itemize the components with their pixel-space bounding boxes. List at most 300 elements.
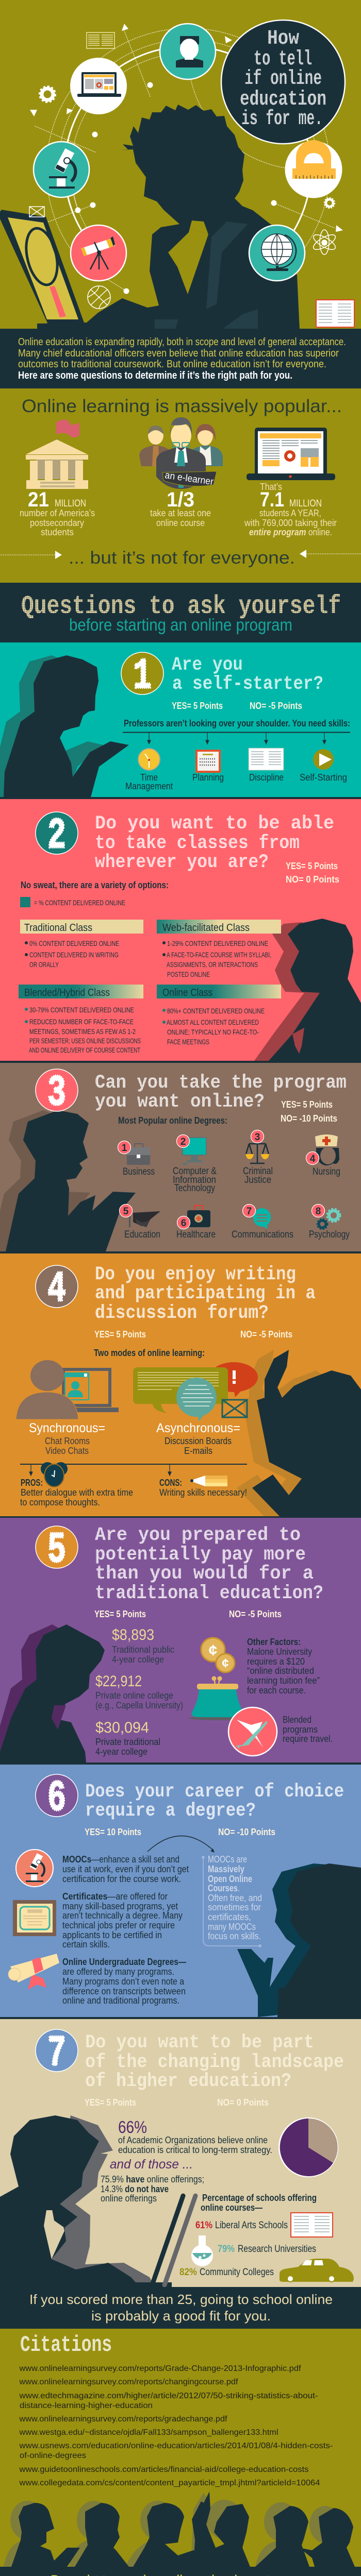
number badge: 5 (47, 1526, 66, 1575)
degrees text: online and traditional programs. (62, 1995, 179, 2006)
asynchronous list: Discussion Boards (165, 1436, 232, 1446)
stat: liberal arts (195, 2220, 288, 2231)
blended travel note: programs (283, 1724, 318, 1735)
blended travel note: Blended (283, 1715, 311, 1725)
points: NO= 0 Points (217, 2097, 269, 2108)
points (172, 701, 302, 711)
rank badges: 8 (316, 1206, 321, 1217)
skill labels: Planning (192, 772, 224, 783)
option: web-facilitated class: 1-29% CONTENT DELIVERED ONLINE (167, 939, 268, 947)
MOOCs text (62, 1854, 189, 1884)
stat: 66% (118, 2117, 272, 2155)
icon: gear (40, 87, 55, 102)
stat: 21 million: students (41, 527, 74, 537)
footer credit (0, 2567, 361, 2576)
option: traditional class: 0% CONTENT DELIVERED ONLINE (29, 939, 119, 947)
option: blended class: REDUCED NUMBER OF FACE-TO-FACE (29, 1018, 134, 1026)
degree: education (124, 1211, 160, 1240)
option: blended class: 30-79% CONTENT DELIVERED ONLINE (29, 1006, 134, 1014)
pros text: Better dialogue with extra time (21, 1487, 133, 1498)
stat: community colleges: 82% (179, 2267, 197, 2278)
points: NO= -5 Points (229, 1609, 282, 1619)
laptop screen bars (152, 2196, 195, 2285)
degrees text: difference on transcripts between (62, 1986, 186, 1996)
cost: public college: Traditional public (112, 1645, 174, 1655)
degrees text: Online Undergraduate Degrees— (62, 1957, 186, 1967)
pros text: to compose thoughts. (20, 1497, 100, 1507)
title text: How (267, 27, 299, 50)
tablet with magnifier (0, 210, 87, 330)
icon: diploma scroll (8, 1954, 59, 1990)
rank badges: 6 (181, 1218, 186, 1229)
icon: book (249, 748, 284, 770)
school percentages heading: Percentage of schools offering (202, 2193, 317, 2203)
option: blended class: Blended/Hybrid Class (24, 987, 110, 998)
citation links: www.guidetoonlineschools.com/articles/financial-aid/college-education-costs (19, 2465, 308, 2474)
blended travel note: require travel. (283, 1734, 333, 1744)
panel: conclusion: If you scored more than 25, going to school online (29, 2292, 333, 2307)
points: YES= 10 Points (85, 1827, 141, 1837)
stat: 7.1 million: with 769,000 taking their (244, 518, 337, 528)
icon: basketball (88, 286, 110, 309)
option: blended class: PER SEMESTER; USES ONLINE DISCUSSIONS (29, 1037, 141, 1045)
points: YES= 5 Points (94, 1609, 146, 1619)
silhouette (0, 655, 129, 797)
stat: 1/3: online course (156, 518, 205, 528)
option: traditional class: Traditional Class (24, 922, 92, 934)
modes lead: Two modes of online learning: (94, 1348, 205, 1358)
panel: question 5 (0, 1518, 361, 1765)
stat: liberal arts: Liberal Arts Schools (215, 2220, 288, 2231)
question: of higher education? (85, 2071, 291, 2092)
stat: 66%: of Academic Organizations believe online (118, 2135, 268, 2145)
e-learner banner text: an e-learner (164, 470, 215, 487)
cons text: CONS: (159, 1478, 182, 1488)
school percentages heading (201, 2193, 317, 2213)
panel: questions banner (0, 583, 361, 642)
icon circle: microscope (34, 142, 89, 197)
question (85, 2032, 344, 2092)
points (94, 1329, 292, 1340)
cost: public college (112, 1626, 174, 1665)
degrees text: Many programs don’t even note a (62, 1976, 185, 1987)
icon: coins and purse: ¢ (209, 1642, 217, 1659)
network arcs (46, 28, 330, 255)
icon: gear small (324, 198, 335, 208)
options lead: No sweat, there are a variety of options: (21, 880, 169, 890)
icon: asynchronous bubbles (133, 1362, 258, 1421)
cost: private college: 4-year college (95, 1747, 147, 1757)
citation links: www.onlinelearningsurvey.com/reports/gradechange.pdf (19, 2415, 227, 2424)
degree: computer: Technology (174, 1183, 215, 1194)
certificates text: many skill-based programs, yet (62, 1901, 178, 1911)
offerings stat: 75.9% have online offerings; (101, 2174, 204, 2184)
silhouette (0, 1110, 136, 1251)
option: traditional class (20, 920, 143, 969)
question (95, 1072, 347, 1113)
citation links: of-online-degrees (20, 2451, 86, 2460)
stat: community colleges: Community Colleges (200, 2267, 274, 2278)
MOOCs definition callout (202, 1854, 262, 1947)
points: YES= 5 Points (281, 1099, 333, 1110)
stat: 1/3 (150, 488, 211, 528)
certificates text (62, 1891, 183, 1950)
panel: popularity stats (0, 388, 361, 583)
icon: coins and purse: ¢ (222, 1656, 229, 1670)
stat: 7.1 million: entire program online. (249, 527, 332, 537)
degree: criminal justice: Justice (244, 1175, 271, 1185)
question: than you would for a (95, 1563, 314, 1585)
MOOCs definition callout: many MOOCs (208, 1922, 256, 1932)
icon: synchronous video chat (16, 1360, 119, 1419)
title text: education (240, 88, 326, 111)
cost: online college: $22,912 (95, 1673, 142, 1690)
icon: university building (26, 420, 88, 489)
cost: public college: 4-year college (112, 1654, 164, 1665)
MOOCs text: certification for the course work. (62, 1874, 181, 1884)
degree: nursing: Nursing (313, 1166, 340, 1177)
silhouette (254, 919, 361, 1061)
citation links: distance-learning-higher-education (20, 2401, 153, 2410)
icon: envelope (29, 207, 44, 217)
tagline with arrows (0, 548, 361, 568)
icon: clock (138, 749, 160, 770)
points: NO= 0 Points (286, 874, 339, 885)
other factors text: Other Factors: (247, 1637, 301, 1647)
degree: healthcare: Healthcare (176, 1229, 216, 1240)
arrow lines (26, 24, 343, 294)
option: web-facilitated class: ASSIGNMENTS, OR INTERACTIONS (167, 960, 258, 969)
option: web-facilitated class (157, 920, 281, 978)
points: YES= 5 Points (85, 2097, 136, 2108)
skill labels: Management (125, 781, 173, 791)
asynchronous list: Asynchronous= (156, 1421, 240, 1435)
degree: computer: Computer & (173, 1166, 217, 1177)
MOOCs definition callout: Open Online (208, 1874, 252, 1884)
panel: citations (0, 2329, 361, 2568)
points (85, 1827, 275, 1837)
panel: question 7 (0, 2019, 361, 2287)
stat: 7.1 million: That’s (260, 482, 282, 492)
stat: 1/3: take at least one (150, 508, 211, 518)
title text (240, 27, 326, 131)
cost: online college: (e.g., Capella University) (95, 1700, 183, 1710)
degrees text: are offered by many programs. (62, 1967, 174, 1977)
degree: healthcare (176, 1206, 216, 1240)
MOOCs definition callout: focus on skills. (208, 1931, 261, 1941)
other factors text: requires a $120 (247, 1656, 305, 1667)
certificates text: certain skills. (62, 1939, 110, 1950)
stat: liberal arts: 61% (195, 2220, 212, 2231)
option: online class: ALMOST ALL CONTENT DELIVERED (167, 1018, 259, 1026)
icon: open book (87, 32, 114, 48)
rank badges (118, 1130, 325, 1229)
points (85, 2097, 269, 2108)
icon: microscope badge (16, 1850, 53, 1887)
number badge (36, 2029, 78, 2078)
skill labels: Discipline (249, 772, 284, 783)
points: NO= -5 Points (250, 701, 302, 711)
points: NO= -5 Points (240, 1329, 292, 1340)
rank badges: 5 (123, 1206, 129, 1217)
degree: criminal justice: Criminal (243, 1166, 273, 1177)
offerings stat: online offerings (101, 2193, 157, 2204)
cost: private college: $30,094 (95, 1719, 149, 1736)
skill labels: Self-Starting (300, 772, 347, 783)
icon: pencil (190, 1476, 227, 1486)
panel: hero (0, 0, 361, 330)
stat: 21 million (20, 488, 95, 537)
icon: book (291, 2213, 333, 2237)
option: online class (157, 985, 281, 1046)
number badge: 3 (47, 1069, 66, 1118)
cost: online college: Private online college (95, 1690, 173, 1701)
icon circle: globe (249, 225, 305, 281)
cons text: Writing skills necessary! (159, 1487, 247, 1498)
degrees lead: Most Popular online Degrees: (118, 1115, 227, 1126)
stat: 21 million: 21 (28, 488, 49, 511)
question: discussion forum? (95, 1302, 269, 1324)
question: Do you want to be able (95, 813, 334, 835)
pros text (20, 1478, 133, 1507)
curved arrow (147, 1836, 215, 1853)
title circle (221, 20, 345, 144)
asynchronous list (156, 1421, 240, 1456)
question: wherever you are? (95, 852, 269, 873)
panel: question 1 (0, 642, 361, 799)
icon: alarm clock (41, 1462, 68, 1487)
number badge (36, 1265, 78, 1314)
option: blended class (19, 985, 143, 1054)
offerings stat: 14.3% do not have (101, 2184, 169, 2194)
question: traditional education? (95, 1583, 323, 1604)
number badge: 1 (133, 652, 152, 701)
rank badges: 7 (247, 1206, 252, 1217)
number badge (36, 812, 78, 861)
MOOCs text: use it at work, even if you don’t get (62, 1864, 189, 1874)
stat: 1/3: 1/3 (167, 488, 194, 511)
stat: 21 million: MILLION (55, 498, 86, 509)
MOOCs definition callout: sometimes for (208, 1902, 261, 1912)
audience silhouettes (4, 2492, 355, 2567)
question: require a degree? (85, 1800, 256, 1822)
pros text: PROS: (21, 1478, 43, 1488)
citation links: www.edtechmagazine.com/higher/article/2012/07/50-striking-statistics-about- (19, 2392, 318, 2400)
question: a self-starter? (172, 673, 323, 695)
points (94, 1609, 282, 1619)
icon: coins and purse (189, 1638, 247, 1720)
panel: intro text: outcomes to traditional coursework. But online education isn’t for everyone. (18, 359, 326, 370)
number badge: 6 (47, 1774, 66, 1823)
cons text (159, 1478, 247, 1498)
option: traditional class: OR ORALLY (29, 960, 59, 969)
citation links: www.westga.edu/~distance/ojdla/Fall133/sampson_ballenger133.html (19, 2428, 278, 2437)
icon circle: protractor (285, 140, 342, 198)
synchronous list: Chat Rooms (45, 1436, 90, 1446)
icon: laptop large (247, 428, 335, 480)
silhouette (0, 2115, 172, 2287)
number badge (36, 1774, 78, 1823)
MOOCs definition callout: Massively (208, 1864, 244, 1874)
question (95, 1524, 323, 1604)
number badge (36, 1069, 78, 1118)
skill labels: Time (140, 772, 158, 783)
question: to take classes from (95, 833, 300, 854)
points: YES= 5 Points (94, 1329, 146, 1340)
icon: calendar (195, 750, 221, 773)
question: Do you want to be part (85, 2032, 314, 2054)
stat: 66%: education is critical to long-term strategy. (118, 2145, 272, 2155)
question (95, 1264, 316, 1324)
citation links: www.collegedata.com/cs/content/content_payarticle_tmpl.jhtml?articleId=10064 (19, 2479, 320, 2487)
question: and participating in a (95, 1283, 316, 1304)
pie chart (278, 2117, 338, 2177)
panel: intro text: Here are some questions to determine if it’s the right path for you. (18, 370, 292, 381)
citation links: www.usnews.com/education/online-education/articles/2014/01/08/4-hidden-costs- (19, 2442, 333, 2450)
points: YES= 5 Points (286, 861, 338, 871)
question: Do you enjoy writing (95, 1264, 296, 1285)
certificates text: aren’t technically a degree. Many (62, 1910, 183, 1921)
degree: education: Education (124, 1229, 160, 1240)
degree: nursing (313, 1134, 340, 1177)
degree: psychology (309, 1209, 350, 1240)
stat: research universities: Research Universities (238, 2244, 316, 2255)
cost: private college (95, 1719, 160, 1757)
question: you want online? (95, 1091, 265, 1113)
MOOCs definition callout: certificates, (208, 1912, 251, 1922)
other factors text (247, 1637, 320, 1696)
question: potentially pay more (95, 1544, 306, 1566)
MOOCs text: MOOCs—enhance a skill set and (62, 1854, 179, 1865)
option: online class: ONLINE; TYPICALLY NO FACE-TO- (167, 1028, 259, 1036)
number badge (36, 1526, 78, 1575)
points: NO= -10 Points (218, 1827, 275, 1837)
stat: 7.1 million (244, 482, 337, 537)
degree: business: Business (123, 1166, 155, 1177)
citation links (19, 2364, 333, 2487)
and of those: and of those ... (110, 2157, 193, 2172)
option: online class: FACE MEETINGS (167, 1038, 209, 1046)
icon: play (313, 749, 334, 770)
stat: 7.1 million: MILLION (289, 498, 322, 509)
other factors text: for each course. (247, 1685, 306, 1696)
stat: 7.1 million: 7.1 (260, 488, 284, 511)
icon: flask (191, 2235, 213, 2266)
icon: car (280, 2259, 354, 2282)
option: web-facilitated class: Web-facilitated Class (162, 922, 250, 934)
question: Are you (172, 654, 243, 676)
MOOCs definition callout: Often free, and (208, 1893, 262, 1903)
option: blended class: AND ONLINE DELIVERY OF COURSE CONTENT (29, 1046, 140, 1054)
synchronous list: Synchronous= (29, 1421, 105, 1435)
synchronous list (29, 1421, 105, 1456)
title text: if online (244, 67, 322, 91)
panel: question 6 (0, 1765, 361, 2019)
silhouette (0, 1624, 105, 1762)
blended travel note (283, 1715, 333, 1744)
number badge: 2 (47, 812, 66, 861)
degree: psychology: Psychology (309, 1229, 350, 1240)
icon: e-learners group (139, 417, 223, 489)
number badge: 4 (47, 1265, 66, 1314)
MOOCs definition callout: Courses. (208, 1883, 240, 1893)
icon: certificate (13, 1900, 56, 1936)
option: online class: 80%+ CONTENT DELIVERED ONLINE (167, 1007, 265, 1015)
legend: = % CONTENT DELIVERED ONLINE (34, 899, 125, 907)
option: web-facilitated class: A FACE-TO-FACE COURSE WITH SYLLABI, (167, 951, 271, 959)
icon: atom (311, 230, 337, 255)
panel: conclusion (0, 2287, 361, 2329)
icon: red book (316, 300, 354, 327)
question (172, 654, 323, 695)
degree: communications (232, 1208, 293, 1240)
MOOCs definition callout: MOOCs are (208, 1854, 247, 1865)
pros cons arrows (20, 1464, 247, 1476)
panel: question 2 (0, 799, 361, 1063)
panel: intro text (0, 329, 361, 388)
icon circle: teacher (160, 24, 216, 79)
stat: 21 million: postsecondary (30, 518, 84, 528)
points (286, 861, 339, 885)
tagline with arrows: ... but it’s not for everyone. (69, 548, 295, 568)
panel: question 4 (0, 1253, 361, 1518)
icon circle: telescope (71, 225, 126, 281)
certificates text: technical jobs prefer or require (62, 1920, 175, 1930)
rank badges: 2 (180, 1137, 186, 1147)
icon: airplane (228, 1707, 277, 1756)
degree: computer (173, 1138, 217, 1194)
icon circle: laptop (70, 58, 127, 114)
legend (20, 897, 125, 907)
rank badges: 4 (310, 1154, 316, 1164)
certificates text: Certificates—are offered for (62, 1891, 168, 1902)
synchronous list: Video Chats (45, 1446, 89, 1456)
question: Are you prepared to (95, 1524, 301, 1546)
stat: 66%: 66% (118, 2117, 147, 2137)
number badge: 7 (47, 2029, 66, 2078)
degree: business (123, 1144, 155, 1177)
panel: question 3 (0, 1063, 361, 1253)
other factors text: “online distributed (247, 1666, 314, 1676)
title text: to tell (254, 48, 312, 71)
stat: community colleges (179, 2267, 274, 2278)
stat: 21 million: number of America’s (20, 508, 95, 518)
degree: computer: Information (173, 1175, 216, 1185)
citations heading: Citations (20, 2332, 112, 2358)
skill labels (125, 772, 347, 791)
points: NO= -10 Points (281, 1113, 337, 1124)
citation links: www.onlinelearningsurvey.com/reports/changingcourse.pdf (19, 2378, 238, 2386)
heading: Online learning is massively popular... (22, 396, 342, 416)
man silhouette (37, 105, 300, 329)
citation links: www.onlinelearningsurvey.com/reports/Grade-Change-2013-Infographic.pdf (19, 2364, 301, 2373)
option: blended class: MEETINGS, SOMETIMES AS FEW AS 1-2 (29, 1027, 136, 1036)
cost: public college: $8,893 (112, 1626, 154, 1643)
option: traditional class: CONTENT DELIVERED IN WRITING (29, 951, 119, 959)
silhouette (237, 1350, 361, 1516)
degree: communications: Communications (232, 1229, 293, 1240)
silhouette (237, 1863, 361, 2019)
certificates text: applicants to be certified in (62, 1930, 162, 1940)
rank badges: 1 (122, 1143, 127, 1154)
option: online class: Online Class (162, 987, 212, 998)
degrees text (62, 1957, 186, 2006)
cost: online college (95, 1673, 183, 1710)
other factors text: learning tuition fee” (247, 1675, 320, 1686)
degree: criminal justice (243, 1144, 273, 1185)
rank badges: 3 (255, 1132, 260, 1143)
other factors text: Malone University (247, 1647, 312, 1657)
